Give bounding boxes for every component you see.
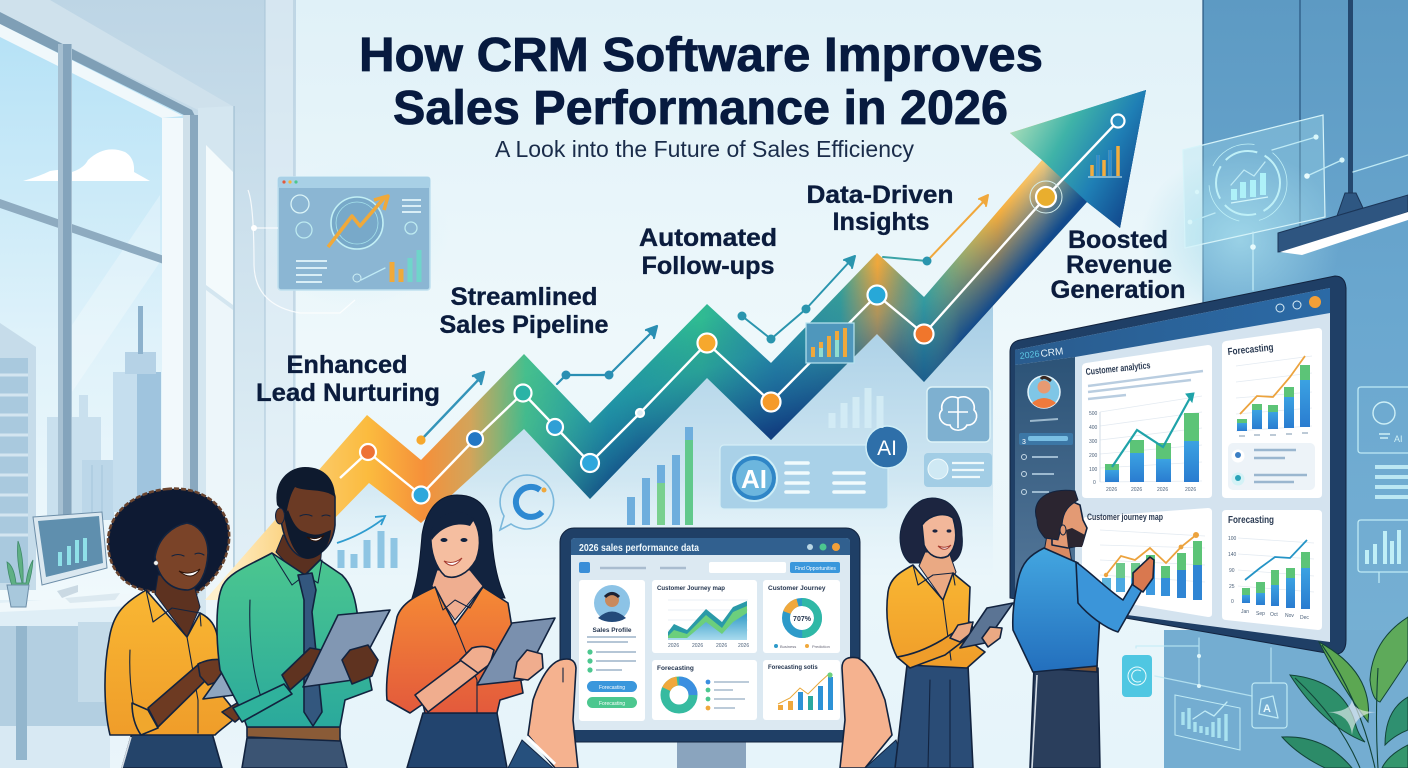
second forearm bbox=[222, 694, 262, 722]
panel: forecasting top bbox=[1222, 328, 1322, 498]
central tablet bbox=[560, 528, 860, 768]
hair bbox=[108, 489, 229, 592]
left wall bbox=[0, 0, 296, 768]
tablet bbox=[960, 603, 1013, 648]
pale background bars bbox=[631, 427, 689, 525]
arrow: lead nurturing bbox=[416, 372, 484, 445]
panel: customer analytics: Customer analytics bbox=[1085, 360, 1151, 378]
tablet hand bbox=[982, 627, 1002, 647]
toolbar bbox=[579, 562, 840, 573]
leaf bbox=[1370, 617, 1408, 702]
panel: forecasting bottom: 140 bbox=[1228, 552, 1237, 558]
arrow: follow-ups bbox=[738, 256, 855, 344]
profile card: Forecasting bbox=[599, 685, 625, 691]
badge: AI node: AI bbox=[877, 437, 897, 460]
tablet bbox=[477, 618, 555, 685]
face bbox=[155, 523, 208, 590]
ceiling lamp bbox=[1278, 0, 1408, 255]
arm bbox=[1076, 562, 1142, 632]
badge: AI node bbox=[866, 426, 908, 468]
panel: forecasting bars bbox=[763, 660, 840, 720]
pale blue structure under the arrow bbox=[330, 305, 993, 575]
monitor frame bbox=[1010, 276, 1346, 654]
icon: potted plant bbox=[7, 541, 33, 607]
sidebar: 3 bbox=[1022, 439, 1026, 446]
panel: brain icon bbox=[927, 387, 990, 442]
connector arrows between stages bbox=[416, 195, 988, 445]
tablet hand bbox=[237, 668, 262, 702]
panel: customer journey donut: Prediction bbox=[812, 644, 830, 649]
hair bbox=[900, 498, 962, 563]
label: enhanced lead nurturing bbox=[256, 351, 440, 407]
hand bbox=[460, 646, 494, 673]
arrow: insights bbox=[883, 195, 988, 266]
panel: forecasting pie bbox=[652, 660, 757, 720]
trousers bbox=[407, 713, 507, 768]
hand bbox=[342, 645, 378, 684]
leaf bbox=[1385, 697, 1408, 745]
hair bbox=[276, 467, 335, 515]
panel: forecasting bottom: 0 bbox=[1231, 599, 1234, 605]
label: enhanced lead nurturing: Lead Nurturing bbox=[256, 379, 440, 407]
panel: AI assistant bbox=[720, 445, 888, 509]
profile card: Sales Profile bbox=[592, 627, 632, 634]
panel: forecasting bottom: 100 bbox=[1228, 536, 1237, 542]
circuit lines bbox=[1136, 638, 1271, 696]
tablet bbox=[203, 640, 279, 699]
trousers bbox=[242, 738, 347, 768]
cuff bbox=[132, 703, 158, 735]
label: boosted revenue generation bbox=[1050, 226, 1186, 304]
panel: customer journey map: 2026 bbox=[738, 643, 749, 649]
window frame bbox=[0, 0, 234, 640]
person: woman in yellow blouse bbox=[105, 489, 279, 768]
panel: customer analytics bbox=[1082, 345, 1212, 498]
panel: AI assistant: AI bbox=[741, 464, 767, 494]
panel: forecasting bottom bbox=[1222, 510, 1322, 630]
panel: forecasting top: Forecasting bbox=[1227, 342, 1274, 358]
panel: customer journey donut: 707% bbox=[793, 616, 812, 623]
subtitle: A Look into the Future of Sales Efficiency bbox=[495, 136, 914, 162]
mini chart by man bbox=[337, 516, 394, 568]
panel: forecasting bottom: Sep bbox=[1256, 611, 1265, 617]
forearm bbox=[415, 652, 485, 712]
light beam bbox=[72, 195, 160, 392]
label: streamlined sales pipeline: Sales Pipeline bbox=[440, 311, 609, 339]
panel: customer analytics: 100 bbox=[1089, 467, 1098, 473]
trousers bbox=[1030, 668, 1100, 768]
panel: customer analytics: 2026 bbox=[1106, 487, 1117, 493]
label: boosted revenue generation: Revenue bbox=[1066, 251, 1172, 279]
tablet header: 2026 sales performance data bbox=[579, 543, 699, 554]
face bbox=[1052, 497, 1087, 548]
face bbox=[922, 515, 956, 558]
title: Sales Performance in 2026 bbox=[393, 82, 1008, 135]
label: data-driven insights: Data-Driven bbox=[806, 181, 954, 209]
panel: forecasting bottom: Forecasting bbox=[1228, 515, 1274, 526]
forearm bbox=[897, 622, 975, 668]
beard bbox=[1066, 528, 1085, 547]
top bar bbox=[1015, 288, 1330, 365]
neck bbox=[276, 535, 322, 578]
right hand bbox=[840, 657, 905, 768]
forearm bbox=[148, 663, 212, 727]
cloud bbox=[23, 149, 150, 181]
icon: gold growth arrow bbox=[328, 196, 388, 247]
panel: forecasting bottom: 25 bbox=[1229, 584, 1235, 590]
label: automated follow-ups: Follow-ups bbox=[642, 252, 774, 280]
icon: A network panel bbox=[1252, 683, 1287, 728]
shirt bbox=[217, 553, 372, 727]
panel: customer journey map: 2026 bbox=[668, 643, 679, 649]
icon: wall bars panel bbox=[1358, 520, 1408, 583]
neck bbox=[432, 570, 483, 620]
desk with monitor and plant bbox=[0, 512, 140, 768]
panel: forecasting bottom: Oct bbox=[1270, 612, 1278, 618]
label: automated follow-ups bbox=[639, 224, 777, 280]
panel: customer journey map bbox=[652, 580, 757, 653]
panel: forecasting bottom: Dec bbox=[1300, 615, 1309, 621]
label: boosted revenue generation: Generation bbox=[1050, 276, 1186, 304]
neck bbox=[1044, 535, 1072, 563]
shirt bbox=[387, 587, 523, 713]
panel: customer analytics: 400 bbox=[1089, 425, 1098, 431]
tablet frame bbox=[560, 528, 860, 742]
face bbox=[431, 517, 479, 577]
label: boosted revenue generation: Boosted bbox=[1068, 226, 1168, 254]
trousers bbox=[895, 665, 973, 768]
leaf bbox=[1319, 642, 1369, 722]
profile card: Forecasting bbox=[599, 701, 625, 707]
tablet header bbox=[571, 538, 850, 555]
panel: customer journey map: Customer journey map bbox=[1087, 512, 1163, 523]
label: enhanced lead nurturing: Enhanced bbox=[286, 351, 408, 379]
forearm bbox=[282, 648, 322, 690]
icon: chat C bbox=[500, 475, 554, 530]
title: How CRM Software Improves bbox=[359, 29, 1043, 82]
person: woman with tablet, yellow shirt bbox=[887, 498, 1013, 768]
hands holding tablet bbox=[508, 657, 905, 768]
floating dashboard panel bbox=[248, 160, 450, 313]
shirt bbox=[887, 565, 985, 668]
panel: forecasting bottom: Jan bbox=[1241, 609, 1249, 615]
wall glow bbox=[1140, 150, 1340, 330]
label: automated follow-ups: Automated bbox=[639, 224, 777, 252]
panel: customer analytics: 500 bbox=[1089, 411, 1098, 417]
neck bbox=[155, 575, 200, 637]
leaf bbox=[1382, 745, 1408, 768]
beard bbox=[284, 510, 331, 559]
left hand bbox=[508, 659, 578, 768]
panel: customer analytics: 0 bbox=[1093, 480, 1096, 486]
node line bbox=[340, 121, 1118, 495]
panel: customer journey donut: Business bbox=[780, 644, 796, 649]
lower right wall bbox=[1164, 630, 1408, 768]
holographic elements under the arrow bbox=[337, 323, 992, 568]
blouse bbox=[105, 590, 238, 735]
plant: bottom right bbox=[1282, 617, 1408, 768]
panel: forecasting bottom: Nov bbox=[1285, 613, 1294, 619]
panel: customer analytics: 200 bbox=[1089, 453, 1098, 459]
panel: customer journey map: 2026 bbox=[692, 643, 703, 649]
holographic growth panel bbox=[1183, 115, 1408, 290]
panel: customer journey donut: Customer Journey bbox=[768, 585, 826, 592]
neck bbox=[919, 552, 956, 600]
pale bars bbox=[832, 388, 880, 428]
icon: desktop monitor bbox=[33, 512, 120, 603]
panel: customer analytics: 300 bbox=[1089, 439, 1098, 445]
nodes bbox=[360, 114, 1124, 504]
panel: customer analytics: 2026 bbox=[1157, 487, 1168, 493]
panel: customer journey map bbox=[1082, 508, 1212, 617]
label: streamlined sales pipeline: Streamlined bbox=[450, 283, 598, 311]
hair bbox=[412, 495, 505, 598]
panel: customer analytics: 2026 bbox=[1131, 487, 1142, 493]
shirt bbox=[1013, 548, 1100, 672]
icon: A network panel: A bbox=[1263, 703, 1271, 715]
icon: wall mini chart bbox=[1175, 695, 1240, 750]
panel: customer journey map: Customer Journey map bbox=[657, 585, 725, 592]
tablet hand bbox=[514, 650, 543, 680]
profile card bbox=[579, 580, 645, 721]
panel: forecasting bottom: 90 bbox=[1229, 568, 1235, 574]
panel: customer analytics: 2026 bbox=[1185, 487, 1196, 493]
person: woman in orange shirt bbox=[387, 495, 555, 768]
label: streamlined sales pipeline bbox=[440, 283, 609, 339]
right wall icons bbox=[1122, 387, 1408, 750]
panel: customer journey donut bbox=[763, 580, 840, 653]
person: man in green shirt bbox=[217, 467, 390, 768]
window with city view bbox=[0, 0, 234, 640]
label: data-driven insights bbox=[806, 181, 954, 236]
watermark star bbox=[1328, 700, 1376, 735]
sleeve bbox=[233, 684, 292, 722]
top bar: 2026 bbox=[1019, 349, 1040, 361]
tie bbox=[298, 573, 322, 726]
arrowhead bbox=[1010, 90, 1146, 228]
big CRM monitor bbox=[1010, 276, 1346, 654]
icon: AI bulb panel bbox=[1358, 387, 1408, 453]
right wall bbox=[1203, 0, 1408, 768]
hand bbox=[198, 659, 232, 685]
arrow: sales pipeline bbox=[557, 326, 657, 384]
person: man in blue shirt pointing bbox=[1013, 490, 1154, 768]
trousers bbox=[122, 733, 222, 768]
leaf bbox=[1290, 675, 1365, 742]
tablet bbox=[303, 610, 390, 687]
panel: customer journey map: 2026 bbox=[716, 643, 727, 649]
belt bbox=[1036, 662, 1097, 672]
growth arrow ribbon bbox=[205, 90, 1146, 600]
belt bbox=[247, 727, 340, 741]
face bbox=[280, 482, 335, 558]
panel: forecasting pie: Forecasting bbox=[657, 665, 694, 672]
panel: forecasting bars: Forecasting sotis bbox=[768, 665, 818, 671]
title bbox=[359, 29, 1043, 135]
mini bars on arrowhead bbox=[1092, 146, 1118, 176]
hair bbox=[1035, 490, 1078, 540]
toolbar: Find Opportunities bbox=[795, 566, 836, 572]
leaf bbox=[1282, 737, 1352, 768]
stage labels bbox=[256, 181, 1186, 407]
icon: cyan app tile bbox=[1122, 655, 1152, 697]
label: data-driven insights: Insights bbox=[832, 208, 930, 236]
icon: AI bulb panel: AI bbox=[1394, 434, 1403, 444]
top bar: CRM bbox=[1040, 346, 1064, 360]
small bar panel on ribbon bbox=[806, 323, 854, 363]
sidebar bbox=[1015, 357, 1075, 600]
panel: person icon bbox=[924, 453, 992, 487]
hand bbox=[1133, 557, 1154, 592]
city skyline bbox=[0, 306, 161, 590]
list lines bbox=[1375, 467, 1408, 497]
hand bbox=[950, 622, 973, 642]
